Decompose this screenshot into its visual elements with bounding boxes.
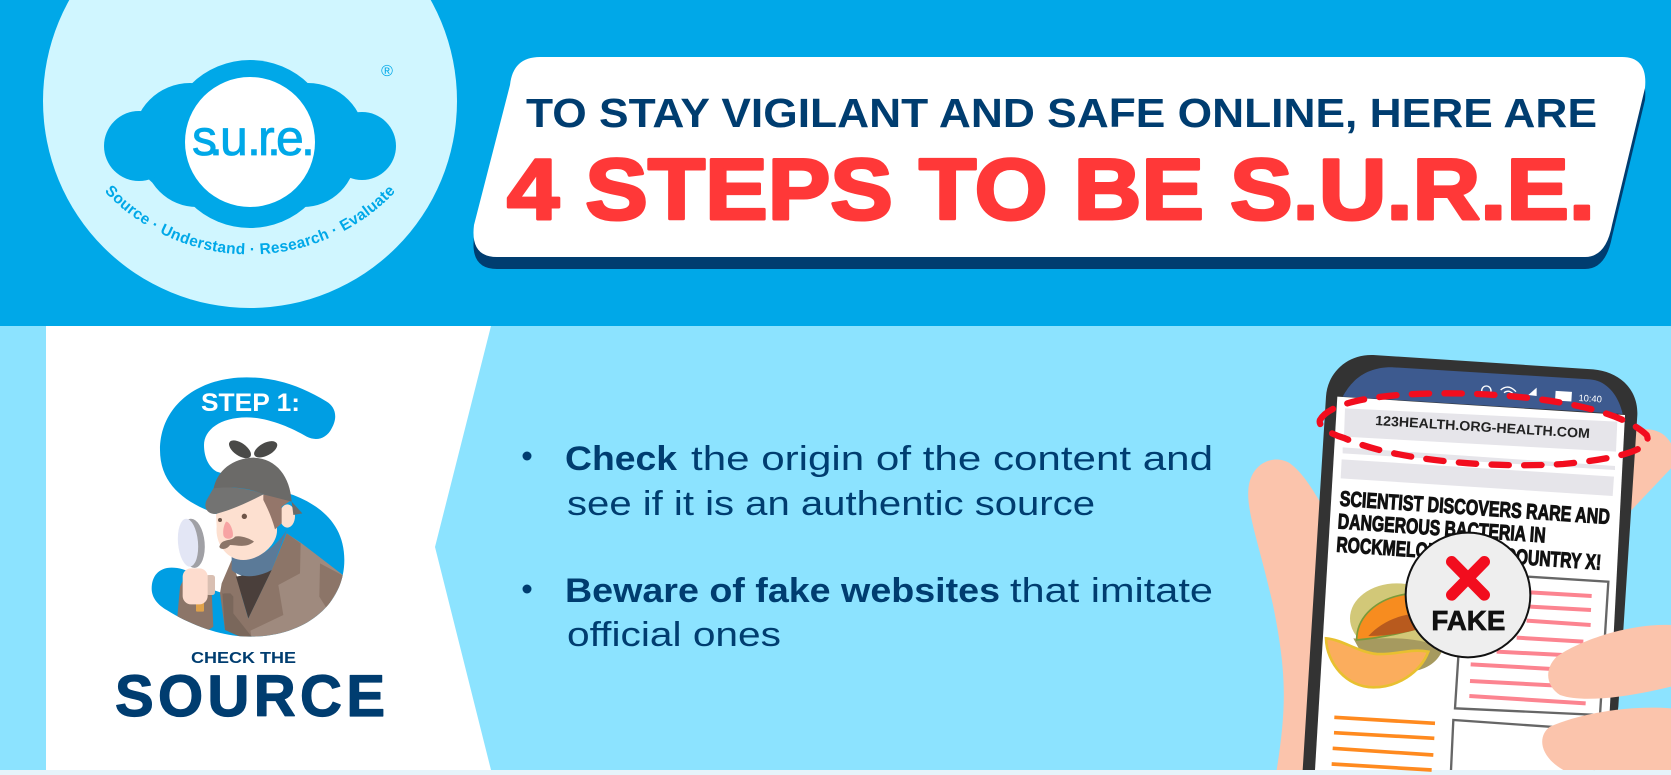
status bar [1343, 367, 1623, 414]
panel: step 1 label [46, 326, 491, 770]
logo: s.u.r.e. cloud: Source · Understand · Research · Evaluate [106, 186, 394, 254]
address bar [1341, 408, 1617, 496]
badge: fake [1406, 533, 1530, 657]
bottom strip [0, 770, 1671, 775]
status bar: 10:40 [1578, 393, 1602, 404]
text block: bullet points: the origin of the content and [691, 440, 1213, 478]
page background [0, 326, 1671, 775]
text block: bullet points: see if it is an authentic source [567, 485, 1095, 523]
article column: orange lines [1332, 717, 1435, 770]
fake headline [1336, 487, 1611, 575]
melon image [1326, 583, 1443, 687]
illustration: hand holding phone with fake site [1248, 355, 1671, 770]
step number: STEP 1: [201, 389, 300, 417]
headline banner [473, 57, 1645, 269]
phone body [1303, 355, 1637, 770]
hand: back fingers [1248, 429, 1671, 770]
logo: s.u.r.e. cloud: ® [381, 63, 393, 80]
hand: front fingers [1542, 625, 1671, 770]
fake headline: DANGEROUS BACTERIA IN [1337, 509, 1546, 547]
headline banner: TO STAY VIGILANT AND SAFE ONLINE, HERE ARE [526, 90, 1597, 136]
text block: bullet points [522, 440, 1213, 654]
phone screen [1315, 397, 1625, 770]
icon: detective in letter S [152, 377, 345, 643]
headline banner: 4 STEPS TO BE S.U.R.E. [507, 142, 1595, 238]
callout: dashed red highlight on address [1320, 393, 1648, 465]
badge: fake: FAKE [1431, 605, 1505, 636]
article box: pink lines [1455, 577, 1608, 715]
text block: bullet points: Check [565, 440, 677, 478]
address bar: 123HEALTH.ORG-HEALTH.COM [1375, 413, 1590, 441]
subheading: CHECK THE [191, 650, 296, 667]
heading: source: SOURCE [115, 664, 385, 729]
header banner [0, 0, 1671, 326]
logo: s.u.r.e. cloud [43, 0, 457, 308]
logo: s.u.r.e. cloud: s.u.r.e. [192, 110, 315, 166]
text block: bullet points: that imitate [1010, 572, 1213, 610]
text block: bullet points: Beware of fake websites [565, 572, 1000, 610]
text block: bullet points: official ones [567, 616, 781, 654]
lower article box [1451, 720, 1597, 770]
